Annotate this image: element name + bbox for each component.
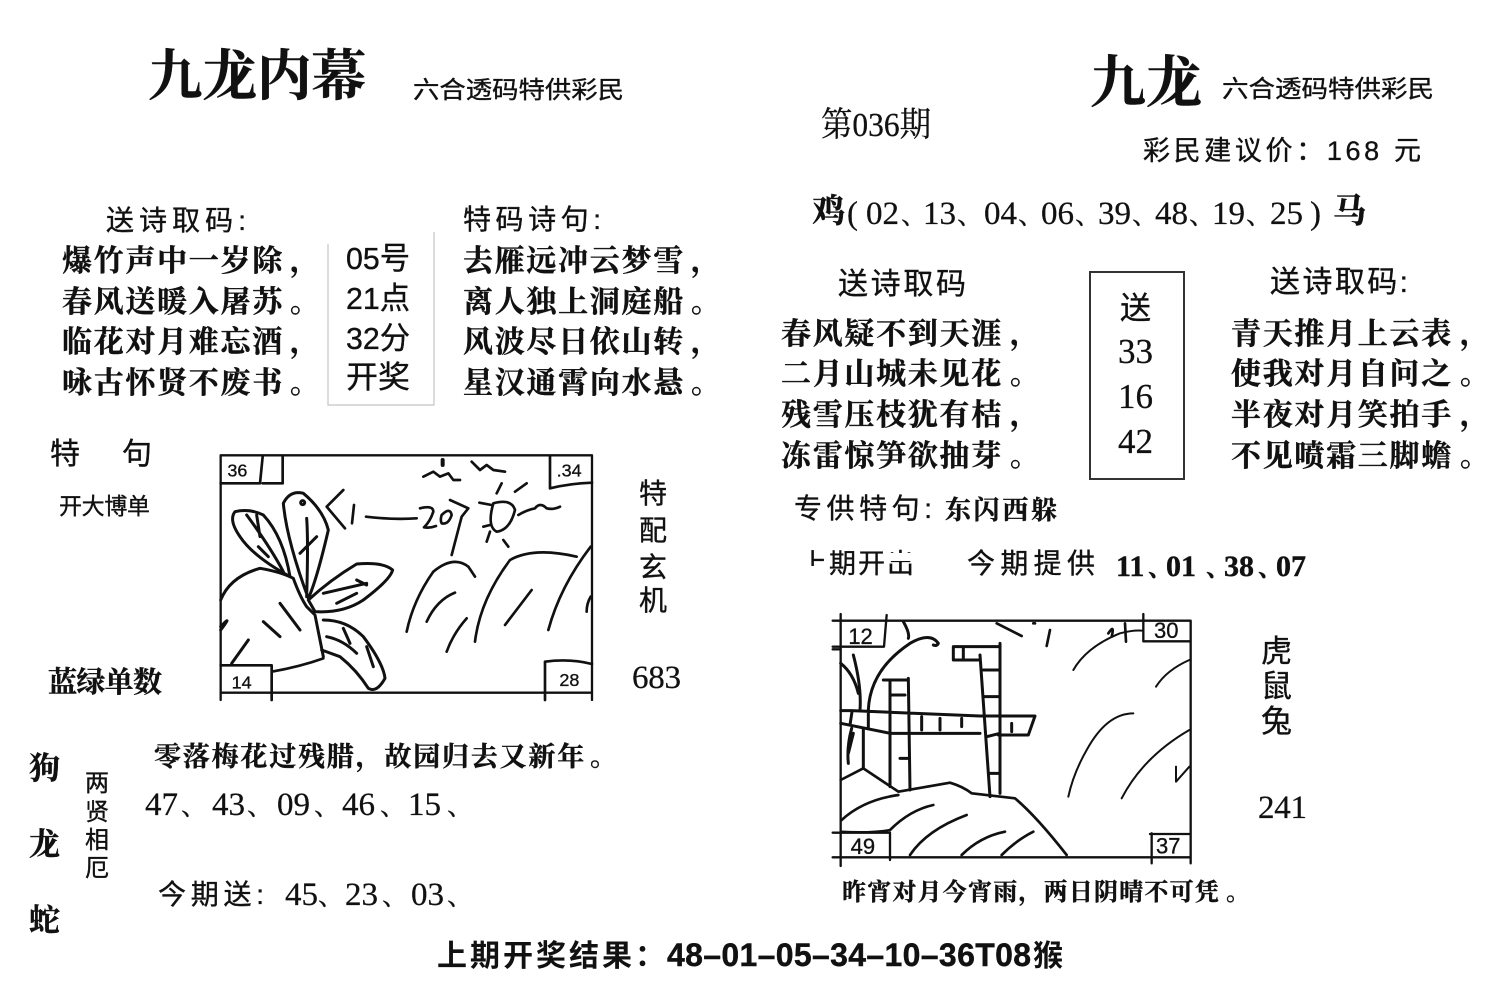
label: blue-green odd: 蓝绿单数 — [48, 665, 162, 699]
rain strokes — [997, 623, 1189, 798]
panel: right poem B — [1231, 266, 1492, 473]
leaves and turnip — [221, 493, 393, 690]
poem text: 风波尽日依山转， — [463, 326, 723, 360]
poem text: 爆竹声中一岁除， — [61, 245, 322, 279]
handwritten range 1-20 — [327, 490, 468, 555]
numbers: rooster list: 02 — [866, 196, 899, 232]
last and current issue: 、 — [1258, 556, 1282, 582]
number list: left: 09 — [277, 787, 310, 823]
number corners: 36 — [227, 461, 247, 481]
last and current issue: 07 — [1276, 550, 1306, 583]
number corners: 12 — [848, 624, 873, 649]
numbers: rooster list: 鸡 — [812, 193, 845, 230]
last and current issue: 11 — [1116, 550, 1144, 583]
last draw result: 48–01–05–34–10–36T08 — [667, 937, 1031, 973]
numbers: rooster list: 、 — [1018, 201, 1044, 230]
vertical text: special match: 机 — [639, 585, 667, 616]
poem text — [1231, 318, 1492, 473]
special phrase left: 开大博单 — [59, 493, 150, 519]
poem text: 离人独上洞庭船。 — [463, 285, 723, 319]
poem text: 星汉通霄向水悬。 — [463, 367, 723, 400]
title: right: 九龙 — [1090, 53, 1202, 115]
last and current issue: 、 — [1148, 556, 1172, 582]
sketch: right picture — [833, 614, 1191, 866]
number list: left: 、 — [181, 792, 207, 821]
bridge and trees — [841, 622, 1035, 797]
numbers: rooster list: 、 — [1132, 201, 1158, 230]
heading: 送诗取码 — [838, 268, 966, 301]
numbers: rooster list: 、 — [1246, 201, 1272, 230]
number corners: 14 — [232, 672, 252, 692]
this issue numbers: left: 03 — [411, 877, 444, 913]
last draw result: 上期开奖结果： — [437, 940, 665, 973]
this issue numbers: left: 、 — [318, 882, 344, 911]
vertical zodiac: left: 蛇 — [29, 903, 60, 938]
numbers: rooster list: 19 — [1212, 196, 1245, 232]
panel: send numbers box: 送 — [1120, 291, 1151, 326]
vertical phrase: two worthies: 两 — [85, 770, 109, 797]
vertical text: special match: 配 — [639, 515, 667, 546]
poem text — [781, 318, 1042, 473]
heading: 送诗取码: — [1270, 266, 1408, 299]
suggested price: 彩民建议价：168 元 — [1143, 136, 1421, 166]
poem text: 使我对月自问之。 — [1231, 358, 1492, 391]
sun and clouds — [423, 460, 560, 547]
hill and grass — [841, 768, 1067, 855]
numbers: rooster list: 马 — [1333, 193, 1366, 230]
heading: send poem: 送诗取码: — [106, 205, 246, 236]
numbers: rooster list: 48 — [1155, 196, 1188, 232]
poem text: 春风疑不到天涯， — [781, 318, 1042, 352]
vertical phrase: two worthies: 贤 — [85, 799, 109, 826]
poem text: 半夜对月笑拍手， — [1231, 399, 1492, 433]
zodiac: right: 兔 — [1261, 704, 1292, 739]
special phrase left — [50, 438, 152, 519]
numbers: rooster list: 39 — [1098, 196, 1131, 232]
number corners: 49 — [851, 834, 875, 859]
issue number: 第036期 — [821, 106, 931, 144]
panel: left poem — [61, 205, 322, 400]
poem text: 不见喷霜三脚蟾。 — [1231, 440, 1492, 473]
vertical phrase: two worthies — [85, 770, 109, 882]
numbers: rooster list: 、 — [1075, 201, 1101, 230]
panel: send numbers box: 33 — [1118, 332, 1153, 371]
last draw result: 猴 — [1033, 940, 1063, 973]
this issue numbers: left: 、 — [447, 882, 473, 911]
numbers: rooster list — [812, 193, 1366, 232]
numbers: rooster list: ) — [1310, 196, 1321, 232]
number list: left: 、 — [247, 792, 273, 821]
vertical phrase: two worthies: 厄 — [85, 855, 109, 882]
number corners: 30 — [1154, 618, 1178, 643]
number list: left: 47 — [145, 787, 178, 823]
zodiac: right: 鼠 — [1261, 669, 1292, 704]
number corners: 28 — [559, 670, 579, 690]
this issue numbers: left: 45 — [285, 877, 318, 913]
subtitle: left: 六合透码特供彩民 — [413, 77, 624, 104]
vertical zodiac: left: 龙 — [29, 827, 60, 862]
this issue numbers: left: 23 — [345, 877, 378, 913]
number 683: 683 — [632, 660, 681, 696]
number list: left: 、 — [314, 792, 340, 821]
numbers: rooster list: ( — [847, 196, 858, 232]
poem text: 去雁远冲云梦雪， — [463, 245, 723, 279]
poem text: 青天推月上云表， — [1231, 318, 1492, 352]
last and current issue: 、 — [1206, 556, 1230, 582]
panel: send numbers box — [1090, 272, 1184, 479]
number corners: .34 — [557, 461, 582, 481]
number list: left: 15 — [408, 787, 441, 823]
vertical text: special match — [639, 478, 667, 616]
special phrase left: 句 — [122, 438, 152, 471]
number list: left: 、 — [447, 792, 473, 821]
number list: left: 46 — [342, 787, 375, 823]
numbers: rooster list: 06 — [1041, 196, 1074, 232]
zodiac: right — [1261, 634, 1292, 739]
vertical phrase: two worthies: 相 — [85, 827, 109, 854]
special phrase left: 特 — [50, 438, 80, 471]
last and current issue — [800, 548, 1306, 583]
special phrase right: 专供特句: — [794, 493, 932, 524]
this issue numbers: left — [158, 877, 473, 913]
number list: left: 、 — [380, 792, 406, 821]
special phrase right — [794, 493, 1057, 525]
panel: right poem A — [781, 268, 1042, 473]
heading: special poem: 特码诗句: — [463, 204, 601, 235]
poem text: 二月山城未见花。 — [781, 358, 1042, 391]
last draw result — [437, 937, 1063, 973]
numbers: rooster list: 25 — [1270, 196, 1303, 232]
poem text: 临花对月难忘酒， — [62, 326, 322, 360]
panel: draw time box: 05号 — [346, 241, 410, 276]
number corners — [833, 614, 1190, 863]
poem text — [61, 245, 322, 400]
subtitle: right: 六合透码特供彩民 — [1222, 76, 1434, 103]
vertical zodiac: left: 狗 — [29, 751, 60, 786]
last and current issue: 上期开出 — [800, 549, 914, 579]
number list: left — [145, 787, 473, 823]
number corners — [221, 457, 592, 700]
panel: send numbers box: 16 — [1118, 377, 1153, 416]
last and current issue: 38 — [1224, 550, 1254, 583]
last and current issue: 今期提供 — [967, 548, 1095, 579]
this issue numbers: left: 、 — [382, 882, 408, 911]
poem text: 春风送暖入屠苏。 — [62, 286, 322, 319]
numbers: rooster list: 、 — [901, 201, 927, 230]
vertical text: special match: 特 — [639, 478, 667, 509]
poem text: 咏古怀贤不废书。 — [62, 366, 322, 400]
numbers: rooster list: 13 — [923, 196, 956, 232]
panel: draw time box: 21点 — [346, 281, 410, 316]
numbers: rooster list: 、 — [957, 201, 983, 230]
numbers: rooster list: 、 — [1189, 201, 1215, 230]
poem text: 冻雷惊笋欲抽芽。 — [781, 440, 1042, 473]
poem text: 残雪压枝犹有桔， — [781, 399, 1042, 433]
vertical text: special match: 玄 — [639, 552, 667, 583]
number corners: 37 — [1156, 833, 1180, 858]
panel: draw time box: 32分 — [346, 321, 410, 356]
last and current issue: 01 — [1166, 550, 1196, 583]
panel: draw time box: 开奖 — [346, 360, 410, 395]
this issue numbers: left: 今期送: — [158, 879, 264, 910]
panel: send numbers box: 42 — [1118, 422, 1153, 461]
poem line: left bottom: 零落梅花过残腊，故园归去又新年。 — [154, 741, 619, 773]
panel: special poem — [463, 204, 723, 400]
hills — [407, 547, 591, 652]
poem text — [463, 245, 723, 400]
number 241: 241 — [1258, 790, 1307, 826]
sketch: left picture — [221, 455, 592, 700]
number list: left: 43 — [212, 787, 245, 823]
vertical zodiac: left — [29, 751, 60, 938]
title: left: 九龙内幕 — [148, 46, 366, 107]
panel: draw time box — [328, 232, 434, 405]
numbers: rooster list: 04 — [984, 196, 1017, 232]
special phrase right: 东闪西躲 — [945, 496, 1057, 525]
caption: right picture: 昨宵对月今宵雨，两日阴晴不可凭。 — [842, 878, 1251, 906]
zodiac: right: 虎 — [1261, 634, 1292, 669]
